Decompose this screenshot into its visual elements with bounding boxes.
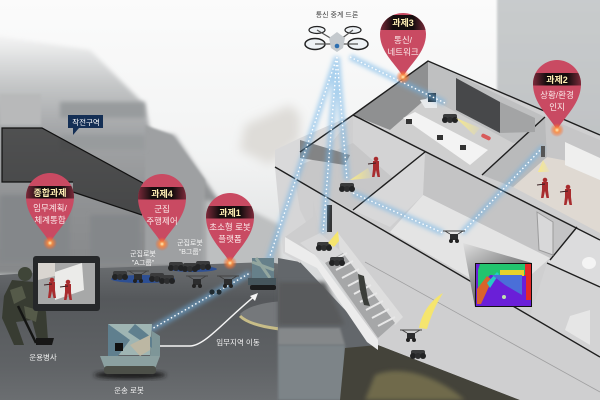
label: soldier: 운용병사 <box>29 353 57 362</box>
label: transport robot: 운송 로봇 <box>114 386 144 395</box>
building: floor plan <box>275 61 600 357</box>
field robot <box>248 258 276 290</box>
tag: operation zone: 작전구역 <box>72 117 100 127</box>
labels: swarm: "A그룹" <box>132 259 155 267</box>
cabinets <box>565 142 600 180</box>
pin: task 4: 주행제어 <box>146 216 178 226</box>
pin: task 2: 인지 <box>549 102 565 112</box>
pin: task 3: 과제3 <box>392 17 414 28</box>
door <box>537 212 553 255</box>
labels: swarm <box>130 238 203 267</box>
room: right <box>482 117 600 233</box>
transport robot <box>94 324 166 379</box>
soldier <box>2 267 54 345</box>
room: left small <box>300 115 425 210</box>
yellow arrows <box>328 231 443 329</box>
pin: task 3: 네트워크 <box>387 47 419 57</box>
corridor floor tiles <box>390 195 550 298</box>
dark callout over building <box>2 128 143 215</box>
extra small robots <box>186 276 239 295</box>
office desks <box>403 93 491 165</box>
pin: task 1: 플랫폼 <box>218 234 242 244</box>
pin: task 3: 통신/ <box>394 35 413 45</box>
pin: integrated task: 체계통합 <box>34 215 66 225</box>
background dust <box>240 105 300 165</box>
wall behind corridor <box>423 152 577 258</box>
white path arrow <box>155 293 258 346</box>
pin: task 2 <box>533 60 581 137</box>
robots in building <box>316 114 480 359</box>
link lines: dotted <box>150 57 543 330</box>
tag: operation zone <box>68 115 103 135</box>
ground bottom right <box>278 258 520 400</box>
labels: swarm: "B그룹" <box>179 248 202 256</box>
label: mission area move: 임무지역 이동 <box>216 337 260 347</box>
pin: integrated task: 종합과제 <box>33 187 67 198</box>
background right haze <box>497 0 600 140</box>
pin: integrated task <box>26 173 74 250</box>
pin: task 1: 과제1 <box>219 207 241 218</box>
pin: task 2: 상황/환경 <box>540 90 574 100</box>
pin: integrated task: 임무계획/ <box>33 203 67 213</box>
restroom room <box>547 227 600 287</box>
staircase <box>285 200 395 350</box>
restroom fixtures <box>565 257 596 345</box>
thermal map inset <box>463 243 532 307</box>
bookshelves <box>456 78 535 133</box>
pin: task 2: 과제2 <box>546 74 568 85</box>
road <box>0 262 345 400</box>
connector wall <box>353 152 425 227</box>
label: relay drone: 통신 중계 드론 <box>316 10 359 19</box>
room: office <box>353 61 545 173</box>
pin: task 1: 초소형 로봇 <box>209 222 251 232</box>
opposing forces <box>368 146 572 205</box>
link lines: glow <box>150 57 543 330</box>
swarm group A <box>111 271 175 284</box>
labels: swarm: 군집로봇 <box>130 249 156 258</box>
road curb <box>240 301 300 332</box>
labels: swarm: 군집로봇 <box>177 238 203 247</box>
tablet <box>33 256 100 311</box>
pin: task 4: 군집 <box>154 204 170 214</box>
wall outlines <box>275 61 600 357</box>
stair soldier <box>358 274 370 306</box>
pin: task 1 <box>206 193 254 270</box>
relay drone <box>305 26 368 52</box>
swarm group B <box>168 261 217 272</box>
pin: task 4: 과제4 <box>151 188 173 199</box>
building: exterior wall <box>275 115 600 400</box>
city buildings left <box>0 35 280 275</box>
pin: task 4 <box>138 174 186 251</box>
pin: task 3 <box>380 13 426 84</box>
